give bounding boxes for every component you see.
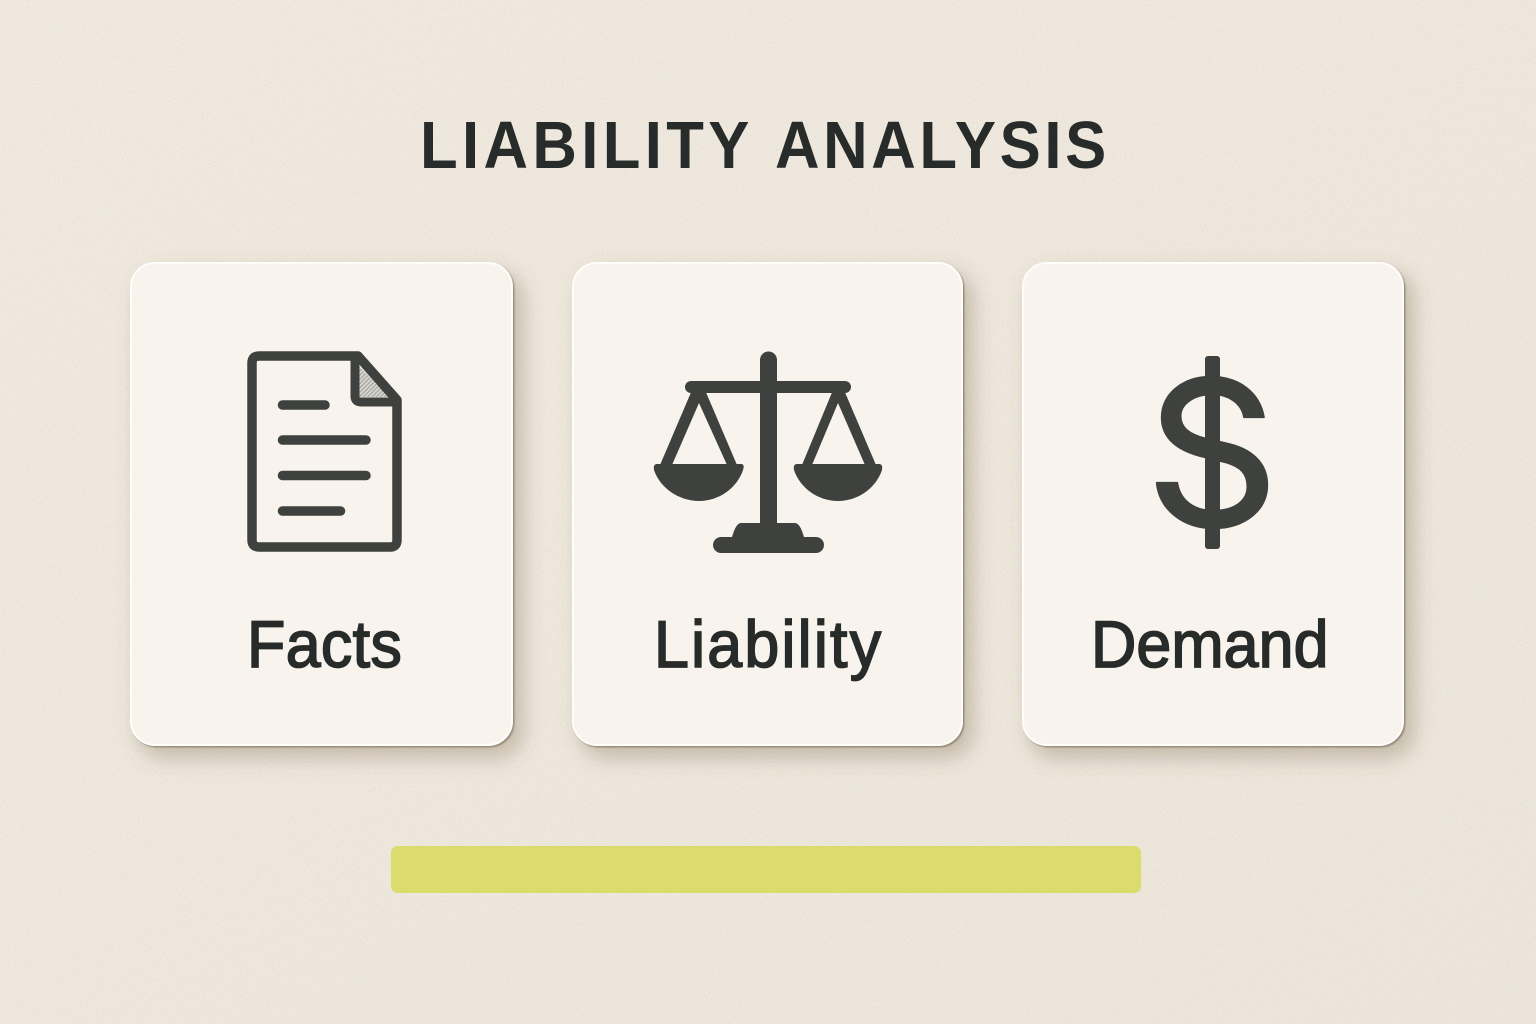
panel: facts — [131, 263, 512, 745]
panel: liability — [573, 263, 962, 745]
label: demand: Demand — [1091, 608, 1329, 681]
label: liability: Liability — [654, 608, 882, 681]
title: ANALYSIS — [775, 108, 1106, 183]
title — [420, 108, 1106, 183]
icon: dollar sign — [1157, 356, 1267, 549]
card background: demand — [1023, 263, 1403, 745]
title: LIABILITY — [420, 108, 749, 183]
card background: facts — [131, 263, 512, 745]
icon: scales of justice — [654, 352, 882, 553]
card background: liability — [573, 263, 962, 745]
icon: document — [252, 356, 397, 547]
panel: demand — [1023, 263, 1403, 745]
yellow-green highlight bar — [391, 846, 1141, 893]
label: facts: Facts — [247, 608, 402, 681]
